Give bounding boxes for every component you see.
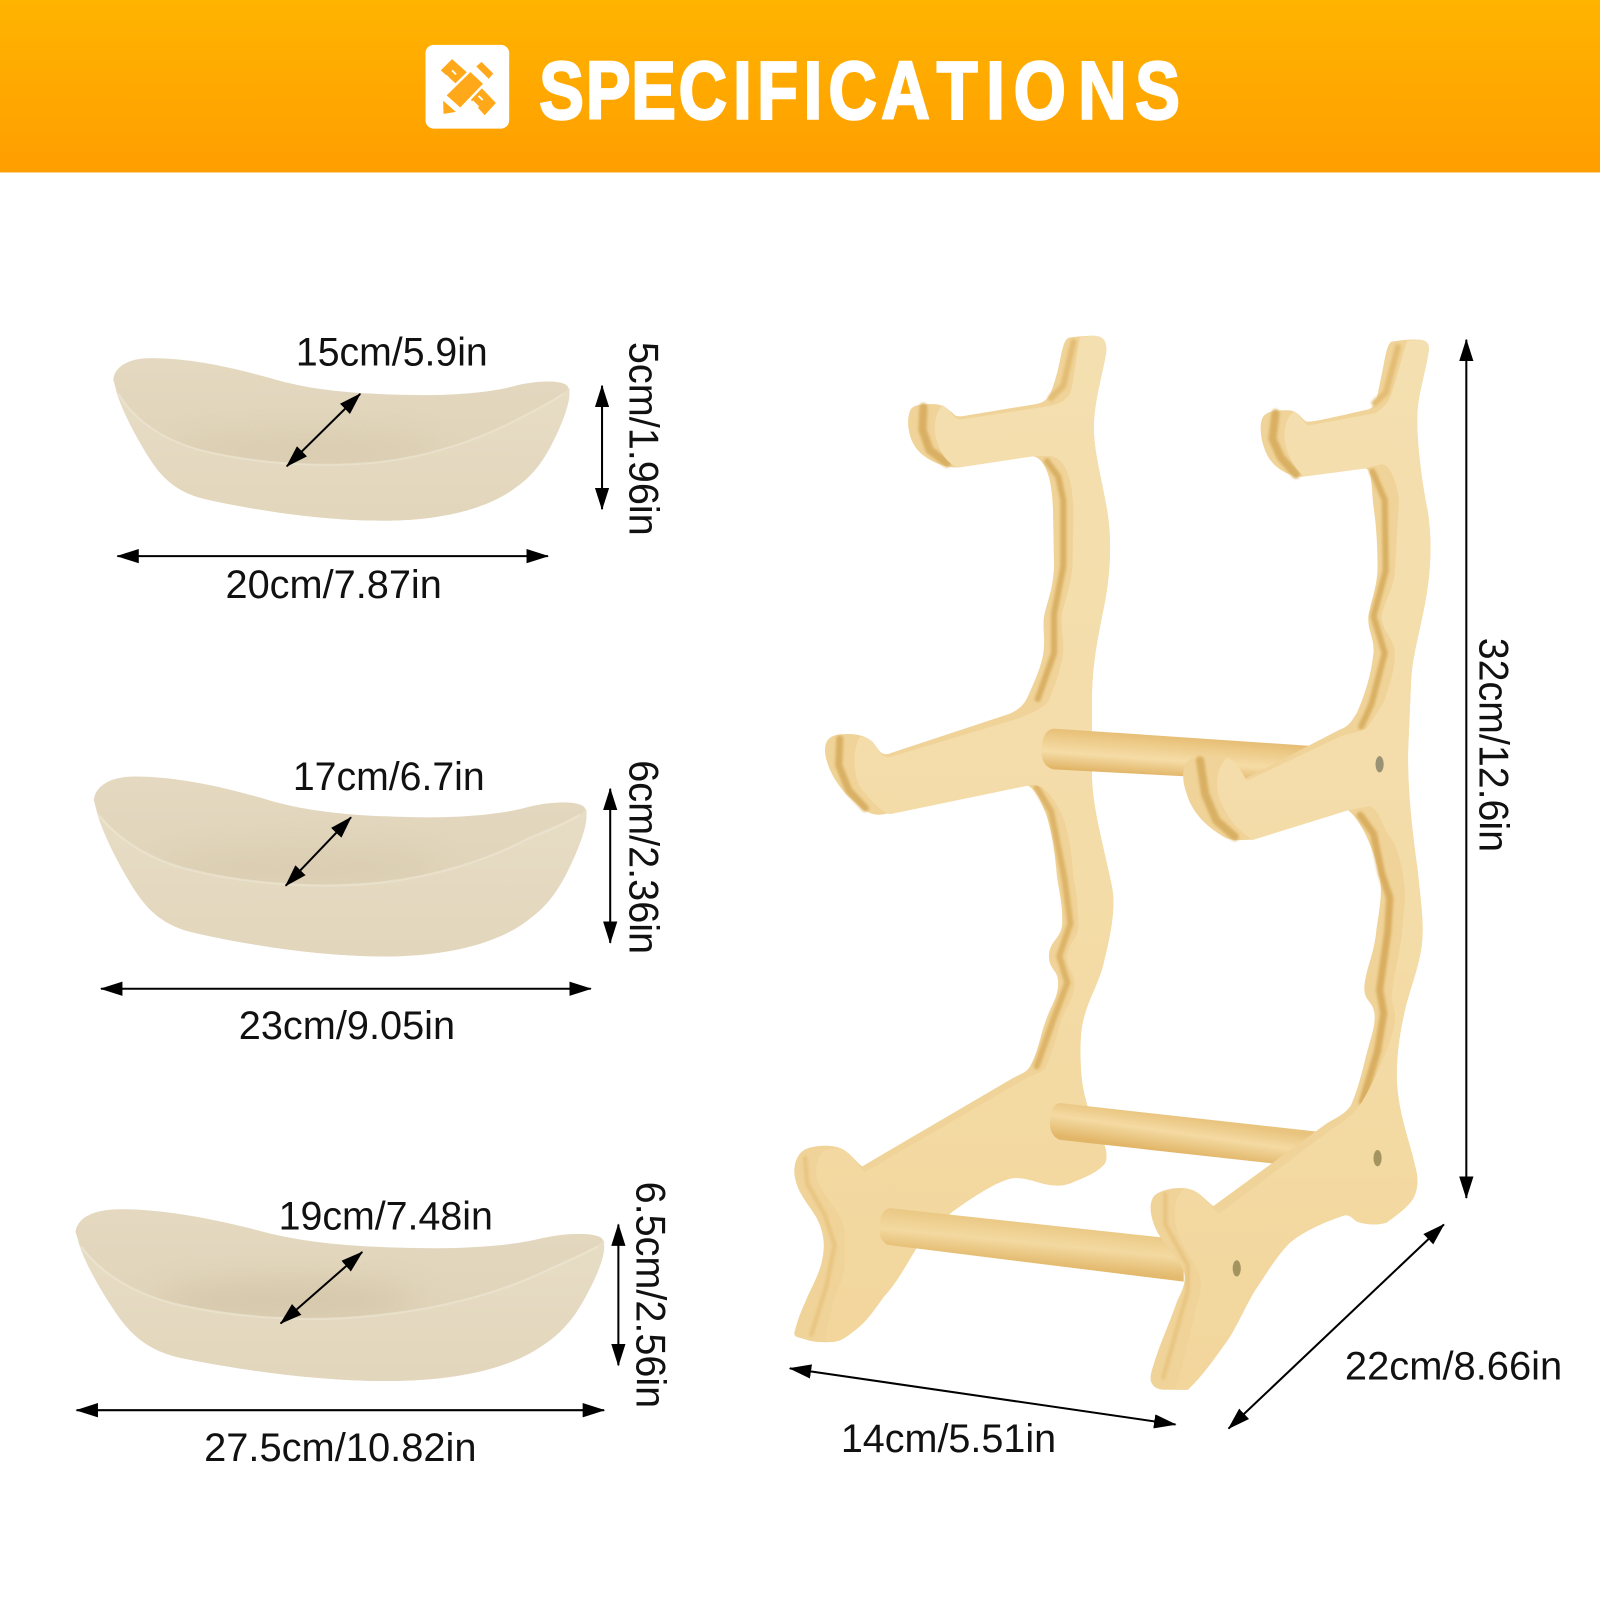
left side frame xyxy=(794,336,1113,1342)
bowl photo small xyxy=(113,358,569,521)
upper cross rod xyxy=(1042,729,1327,784)
panel: large bowl xyxy=(76,1182,675,1470)
panel: medium bowl xyxy=(94,755,668,1048)
label: stand height: 32cm/12.6in xyxy=(1471,638,1518,852)
arrow: bowl length large xyxy=(77,1409,604,1411)
label: width large: 19cm/7.48in xyxy=(279,1195,493,1239)
header banner xyxy=(0,0,1600,172)
label: height large: 6.5cm/2.56in xyxy=(628,1182,675,1408)
right side frame xyxy=(1151,340,1430,1390)
bowl photo medium xyxy=(94,776,586,956)
panel: bamboo stand xyxy=(790,336,1562,1461)
arrow: bowl depth small xyxy=(287,394,360,466)
screw lower rear xyxy=(1373,1150,1382,1166)
label: width small: 15cm/5.9in xyxy=(296,330,488,374)
arrow: bowl length medium xyxy=(101,988,591,990)
arrow: bowl height large xyxy=(617,1224,619,1365)
arrow: stand width xyxy=(790,1368,1176,1424)
arrow: bowl depth medium xyxy=(286,817,351,886)
arrow: bowl height small xyxy=(601,386,603,509)
label: stand depth: 22cm/8.66in xyxy=(1345,1345,1562,1389)
label: height small: 5cm/1.96in xyxy=(621,342,668,536)
panel: small bowl xyxy=(113,330,668,607)
screw upper xyxy=(1376,756,1384,772)
arrow: bowl height medium xyxy=(609,789,611,943)
arrow: stand depth xyxy=(1229,1224,1444,1429)
middle cross rod xyxy=(1050,1103,1327,1169)
front cross rod xyxy=(879,1208,1184,1282)
bowl photo large xyxy=(76,1209,604,1381)
label: length small: 20cm/7.87in xyxy=(226,563,442,607)
screw lower front xyxy=(1233,1260,1241,1277)
label: stand width: 14cm/5.51in xyxy=(841,1417,1056,1461)
title: SPECIFICATIONS xyxy=(539,44,1180,136)
arrow: stand height xyxy=(1465,340,1467,1198)
label: length large: 27.5cm/10.82in xyxy=(204,1426,477,1470)
icon: pencil and ruler xyxy=(426,45,509,129)
label: width medium: 17cm/6.7in xyxy=(293,755,485,799)
arrow: bowl depth large xyxy=(281,1252,362,1323)
label: height medium: 6cm/2.36in xyxy=(621,760,668,954)
arrow: bowl length small xyxy=(117,555,548,557)
label: length medium: 23cm/9.05in xyxy=(239,1004,455,1048)
